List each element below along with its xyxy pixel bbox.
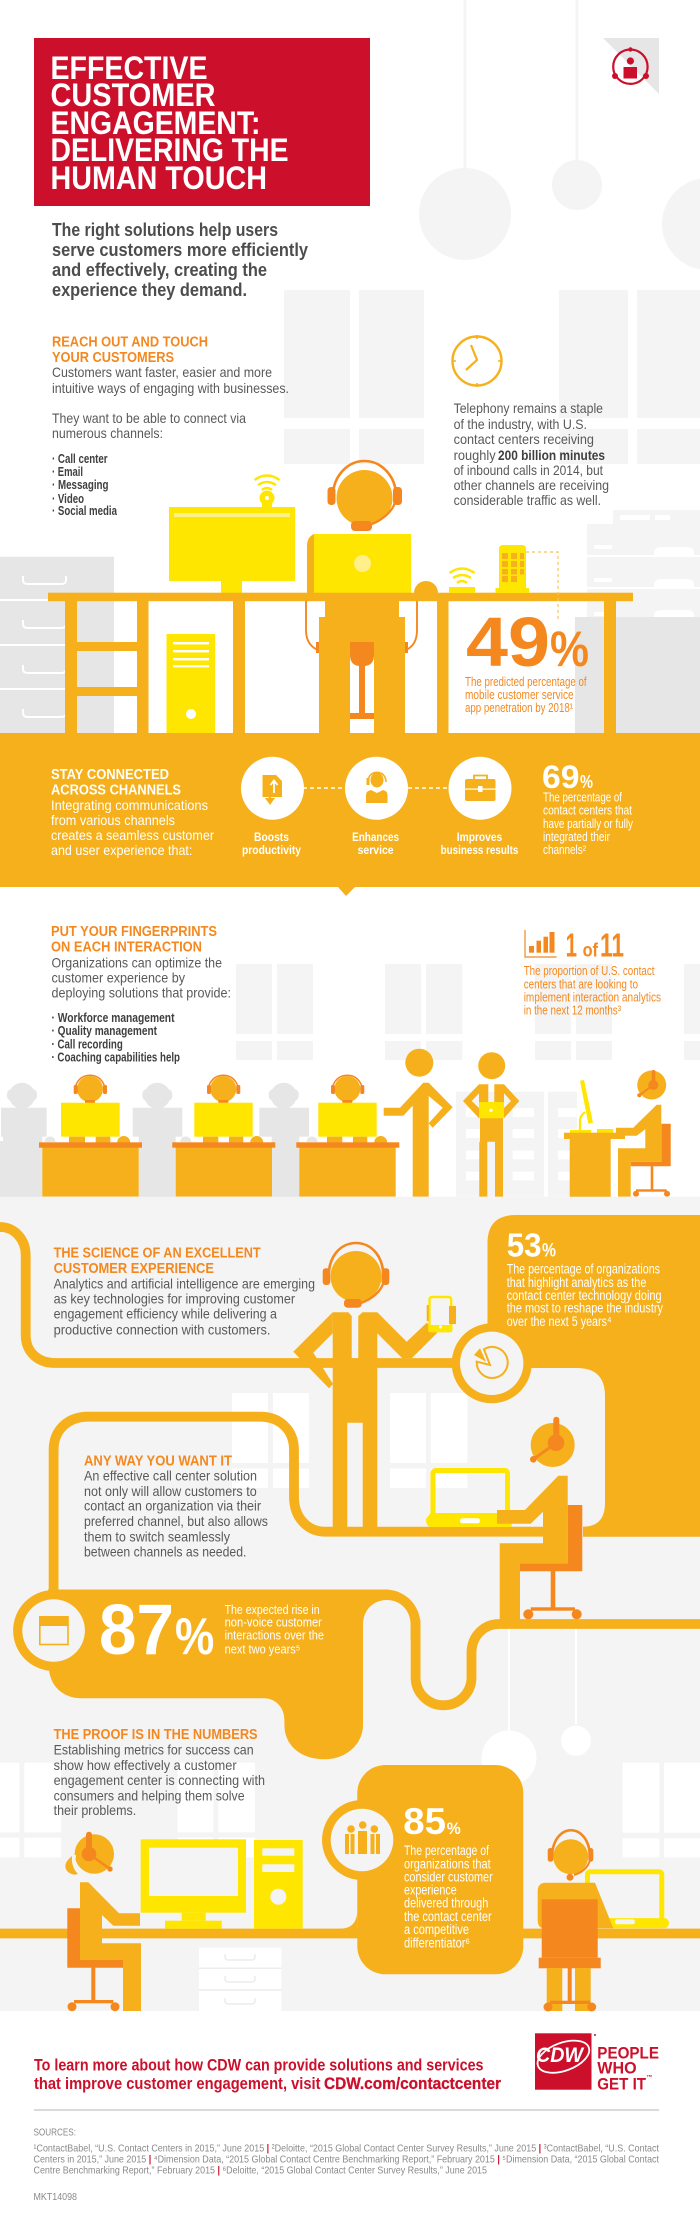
text: call center solution: them to switch seamlessly bbox=[84, 1529, 230, 1545]
illustration: agent desk 3 bbox=[296, 1075, 399, 1197]
intro text: and effectively, creating the bbox=[52, 260, 267, 280]
labels: benefits: Boosts bbox=[254, 832, 289, 844]
sources bbox=[34, 2126, 659, 2203]
text: integrating: and user experience that: bbox=[51, 842, 192, 858]
text: analytics: Analytics and artificial intelligence are emerging bbox=[54, 1276, 315, 1292]
intro text: serve customers more efficiently bbox=[52, 240, 308, 260]
stat: 85 percent: 85 bbox=[403, 1801, 446, 1842]
illustration: seated agent with laptop bbox=[426, 1417, 582, 1622]
text: establishing metrics: engagement center is connecting with bbox=[54, 1772, 265, 1788]
illustration: seated agent right with laptop bbox=[538, 1830, 669, 2012]
heading: stay connected: STAY CONNECTED bbox=[51, 767, 169, 783]
call to action: CDW.com/contactcenter bbox=[324, 2074, 501, 2093]
text: analytics bbox=[54, 1276, 315, 1337]
labels: benefits: productivity bbox=[242, 845, 302, 857]
background: white windows, lamps and drawers bbox=[0, 1393, 700, 2011]
stat: 53 percent bbox=[507, 1227, 663, 1329]
text: telephony: considerable traffic as well. bbox=[454, 492, 601, 508]
stat: 85 percent: % bbox=[447, 1819, 461, 1838]
text: integrating bbox=[51, 797, 214, 858]
stat panel: 53% bbox=[452, 1215, 700, 1537]
text: call center solution bbox=[84, 1468, 268, 1560]
stat: 53 percent: 53 bbox=[507, 1227, 542, 1264]
icon: smartphone bbox=[427, 1297, 456, 1332]
sources: Centers in 2015,” June 2015 | ⁴Dimension Data, “2015 Global Contact Centre Benchmarking Report,” February 2015 | ⁵Dimension Data, “2015 Global Contact bbox=[34, 2154, 659, 2166]
icon: desktop monitor bbox=[141, 1839, 246, 1929]
text: establishing metrics bbox=[54, 1741, 265, 1818]
illustration: standing manager with laptop bbox=[463, 1052, 519, 1197]
icon: customer ring badge bbox=[603, 38, 659, 94]
labels: benefits: Enhances bbox=[352, 832, 399, 844]
list: channels: · Messaging bbox=[52, 478, 108, 492]
call to action: To learn more about how CDW can provide solutions and services bbox=[34, 2056, 484, 2075]
stat caption: in the next 12 months³ bbox=[524, 1003, 621, 1017]
list: channels bbox=[52, 452, 118, 518]
intro text: experience they demand. bbox=[52, 280, 247, 300]
stat: 1 of 11 bbox=[524, 927, 661, 1017]
illustration: seated agent left with computer bbox=[65, 1832, 303, 2011]
title: DELIVERING THE bbox=[50, 132, 288, 168]
stat caption: The expected rise in bbox=[225, 1603, 320, 1617]
stat caption: the contact center bbox=[404, 1909, 492, 1924]
stat caption bbox=[524, 964, 661, 1017]
icon: monitor with webcam bbox=[169, 476, 295, 593]
heading: reach out: YOUR CUSTOMERS bbox=[52, 350, 174, 366]
text: telephony: of the industry, with U.S. bbox=[454, 416, 587, 432]
title: HUMAN TOUCH bbox=[50, 160, 267, 196]
icon: desk phone bbox=[496, 545, 558, 622]
stat caption: a competitive bbox=[404, 1922, 469, 1937]
illustration: seated agent at desk bbox=[564, 1070, 671, 1198]
illustration: standing agent with phone bbox=[293, 1243, 456, 1527]
title: EFFECTIVE bbox=[50, 50, 208, 86]
heading: the science bbox=[54, 1246, 261, 1277]
text: telephony: of inbound calls in 2014, but bbox=[454, 462, 603, 478]
icon: boosts productivity bbox=[241, 757, 304, 820]
stat caption: The percentage of organizations bbox=[507, 1261, 660, 1276]
list: channels: · Video bbox=[52, 492, 84, 506]
list: capabilities: · Coaching capabilities help bbox=[52, 1051, 180, 1065]
heading: stay connected: ACROSS CHANNELS bbox=[51, 782, 181, 798]
list: capabilities: · Quality management bbox=[52, 1024, 158, 1038]
text: customers want: Customers want faster, easier and more bbox=[52, 364, 272, 380]
logo tagline bbox=[597, 2043, 659, 2093]
labels: benefits: service bbox=[358, 845, 394, 857]
desk bbox=[48, 593, 633, 733]
text: analytics: productive connection with customers. bbox=[54, 1321, 270, 1337]
stat: 69% bbox=[542, 759, 634, 857]
panel: stay connected band bbox=[0, 733, 700, 896]
stat caption: over the next 5 years⁴ bbox=[507, 1314, 612, 1329]
icon: calendar bbox=[39, 1616, 69, 1644]
heading: any way: ANY WAY YOU WANT IT bbox=[84, 1454, 232, 1470]
stat caption: implement interaction analytics bbox=[524, 991, 661, 1005]
sources: ¹ContactBabel, “U.S. Contact Centers in 2015,” June 2015 | ²Deloitte, “2015 Global Contact Center Survey Results,” June 2015 | ³ContactBabel, “U.S. Contact bbox=[34, 2143, 659, 2155]
stat caption: organizations that bbox=[404, 1856, 491, 1871]
logo: CDW bbox=[533, 2033, 659, 2093]
text: organizations: Organizations can optimize the bbox=[52, 954, 222, 970]
title bbox=[50, 50, 288, 196]
intro text: The right solutions help users bbox=[52, 220, 278, 240]
list: capabilities: · Workforce management bbox=[52, 1011, 175, 1025]
icon: desktop tower bbox=[254, 1840, 303, 1929]
heading: the proof: THE PROOF IS IN THE NUMBERS bbox=[54, 1727, 258, 1743]
icon: clock bbox=[452, 335, 502, 387]
logo tagline: ™ bbox=[646, 2074, 652, 2081]
text: establishing metrics: consumers and helping them solve bbox=[54, 1788, 245, 1804]
stat caption: that highlight analytics as the bbox=[507, 1275, 646, 1290]
text: telephony: Telephony remains a staple bbox=[454, 400, 603, 416]
heading: fingerprints: ON EACH INTERACTION bbox=[51, 940, 202, 956]
sources: Centre Benchmarking Report,” February 2015 | ⁶Deloitte, “2015 Global Contact Center Survey Results,” June 2015 bbox=[34, 2165, 487, 2177]
icon: bar chart bbox=[525, 930, 557, 957]
labels: benefits: business results bbox=[441, 845, 518, 857]
stat caption: app penetration by 2018¹ bbox=[465, 701, 573, 715]
text: call center solution: contact an organization via their bbox=[84, 1498, 261, 1514]
stat caption bbox=[225, 1603, 324, 1656]
stat: 53 percent: % bbox=[542, 1241, 556, 1262]
stat caption: the most to reshape the industry bbox=[507, 1301, 663, 1316]
icon: wifi router bbox=[449, 568, 475, 593]
text: telephony bbox=[454, 400, 609, 508]
agent figure bbox=[306, 461, 438, 733]
stat caption: channels² bbox=[543, 843, 586, 857]
text: call center solution: preferred channel, but also allows bbox=[84, 1513, 268, 1529]
title panel bbox=[34, 38, 370, 206]
heading: fingerprints bbox=[51, 924, 217, 956]
text: customers want: numerous channels: bbox=[52, 425, 163, 441]
text: customers want: intuitive ways of engaging with businesses. bbox=[52, 380, 289, 396]
background: office windows bbox=[236, 964, 700, 1197]
logo tagline: GET IT bbox=[597, 2074, 647, 2093]
stat caption bbox=[465, 675, 587, 715]
list: channels: · Call center bbox=[52, 452, 108, 466]
text: customers want bbox=[52, 364, 289, 441]
document code: MKT14098 bbox=[34, 2191, 77, 2203]
stat caption: contact centers that bbox=[543, 803, 632, 817]
text: call center solution: not only will allow customers to bbox=[84, 1483, 257, 1499]
text: telephony: roughly bbox=[454, 447, 496, 463]
intro text bbox=[52, 220, 308, 300]
stat caption bbox=[404, 1843, 493, 1950]
stat caption: delivered through bbox=[404, 1895, 488, 1910]
text: customers want: They want to be able to connect via bbox=[52, 410, 246, 426]
stat caption: differentiator⁶ bbox=[404, 1935, 470, 1950]
stat: 1 of 11: 1 bbox=[566, 927, 577, 964]
text: establishing metrics: Establishing metrics for success can bbox=[54, 1741, 254, 1757]
stat caption: mobile customer service bbox=[465, 688, 574, 702]
logo: CDW: CDW bbox=[536, 2044, 585, 2067]
stat: 49%: % bbox=[550, 621, 589, 677]
stat caption bbox=[543, 791, 634, 857]
illustration: agent desk 1 bbox=[39, 1075, 142, 1197]
background: file cabinet bbox=[0, 557, 700, 733]
stat: 87 percent: 87 bbox=[99, 1591, 174, 1670]
stat: 1 of 11: of bbox=[583, 941, 599, 962]
background: hanging lamps bbox=[284, 0, 700, 617]
icon: improves results bbox=[448, 757, 512, 820]
text: organizations: deploying solutions that provide: bbox=[52, 984, 231, 1000]
labels: benefits bbox=[242, 832, 518, 857]
stat: 49%: 49 bbox=[466, 603, 550, 681]
stat caption: integrated their bbox=[543, 830, 610, 844]
stat caption: have partially or fully bbox=[543, 817, 634, 831]
list: capabilities bbox=[52, 1011, 180, 1065]
title: ENGAGEMENT: bbox=[50, 105, 260, 141]
heading: stay connected bbox=[51, 767, 181, 798]
heading: reach out bbox=[52, 335, 208, 366]
text: establishing metrics: their problems. bbox=[54, 1802, 136, 1818]
panel: gray lower background bbox=[0, 1197, 700, 2011]
list: channels: · Email bbox=[52, 465, 83, 479]
stat caption: experience bbox=[404, 1883, 457, 1898]
text: telephony: other channels are receiving bbox=[454, 477, 609, 493]
stat caption: The proportion of U.S. contact bbox=[524, 964, 655, 978]
sources: SOURCES: bbox=[34, 2126, 76, 2138]
stat caption: contact center technology doing bbox=[507, 1288, 662, 1303]
text: telephony: 200 billion minutes bbox=[498, 447, 605, 463]
stat panel: 85% bbox=[322, 1765, 523, 1974]
text: analytics: as key technologies for improving customer bbox=[54, 1291, 295, 1307]
illustration: standing manager bbox=[384, 1049, 453, 1197]
stat caption: The predicted percentage of bbox=[465, 675, 587, 689]
labels: benefits: Improves bbox=[457, 832, 502, 844]
text: integrating: from various channels bbox=[51, 812, 175, 828]
icon: pie chart bbox=[474, 1347, 508, 1378]
stat: 87 percent bbox=[99, 1591, 324, 1670]
text: analytics: engagement efficiency while delivering a bbox=[54, 1306, 277, 1322]
icon: enhances service bbox=[345, 757, 408, 820]
stat: 69%: 69 bbox=[542, 759, 580, 795]
stat caption bbox=[507, 1261, 663, 1329]
illustration: background agents bbox=[0, 1083, 318, 1197]
text: call center solution: between channels as needed. bbox=[84, 1544, 246, 1560]
stat: 69%: % bbox=[580, 772, 593, 792]
heading: fingerprints: PUT YOUR FINGERPRINTS bbox=[51, 924, 217, 940]
stat caption: non-voice customer bbox=[225, 1616, 322, 1630]
illustration: agent desk 2 bbox=[172, 1075, 275, 1197]
logo tagline: WHO bbox=[597, 2059, 637, 2078]
stat caption: The percentage of bbox=[543, 791, 622, 805]
stat caption: interactions over the bbox=[225, 1628, 324, 1642]
logo tagline: PEOPLE bbox=[597, 2043, 659, 2062]
icon: computer tower bbox=[166, 634, 215, 733]
heading: the science: CUSTOMER EXPERIENCE bbox=[54, 1261, 214, 1277]
stat: 49% bbox=[465, 603, 589, 715]
text: establishing metrics: show how effectively a customer bbox=[54, 1757, 237, 1773]
heading: reach out: REACH OUT AND TOUCH bbox=[52, 335, 208, 351]
stat: 87 percent: % bbox=[175, 1608, 214, 1666]
stat panel: 87% bbox=[13, 1590, 420, 1759]
text: organizations: customer experience by bbox=[52, 969, 185, 985]
stat: 1 of 11: 11 bbox=[600, 927, 624, 964]
call to action: that improve customer engagement, visit bbox=[34, 2074, 321, 2093]
stat caption: next two years⁵ bbox=[225, 1642, 300, 1656]
stat caption: consider customer bbox=[404, 1870, 493, 1885]
connector pipes bbox=[0, 1227, 700, 1934]
stat: 85 percent bbox=[403, 1801, 493, 1950]
icon: group of people bbox=[345, 1821, 380, 1854]
list: capabilities: · Call recording bbox=[52, 1038, 123, 1052]
illustration: agent at desk bbox=[48, 461, 633, 733]
text: integrating: creates a seamless customer bbox=[51, 827, 214, 843]
list: channels: · Social media bbox=[52, 504, 118, 518]
stat caption: centers that are looking to bbox=[524, 977, 638, 991]
text: organizations bbox=[52, 954, 231, 1000]
call to action bbox=[34, 2056, 501, 2093]
text: integrating: Integrating communications bbox=[51, 797, 208, 813]
title: CUSTOMER bbox=[50, 77, 216, 113]
stat caption: The percentage of bbox=[404, 1843, 489, 1858]
text: call center solution: An effective call center solution bbox=[84, 1468, 257, 1484]
heading: the science: THE SCIENCE OF AN EXCELLENT bbox=[54, 1246, 261, 1262]
text: telephony: contact centers receiving bbox=[454, 431, 594, 447]
